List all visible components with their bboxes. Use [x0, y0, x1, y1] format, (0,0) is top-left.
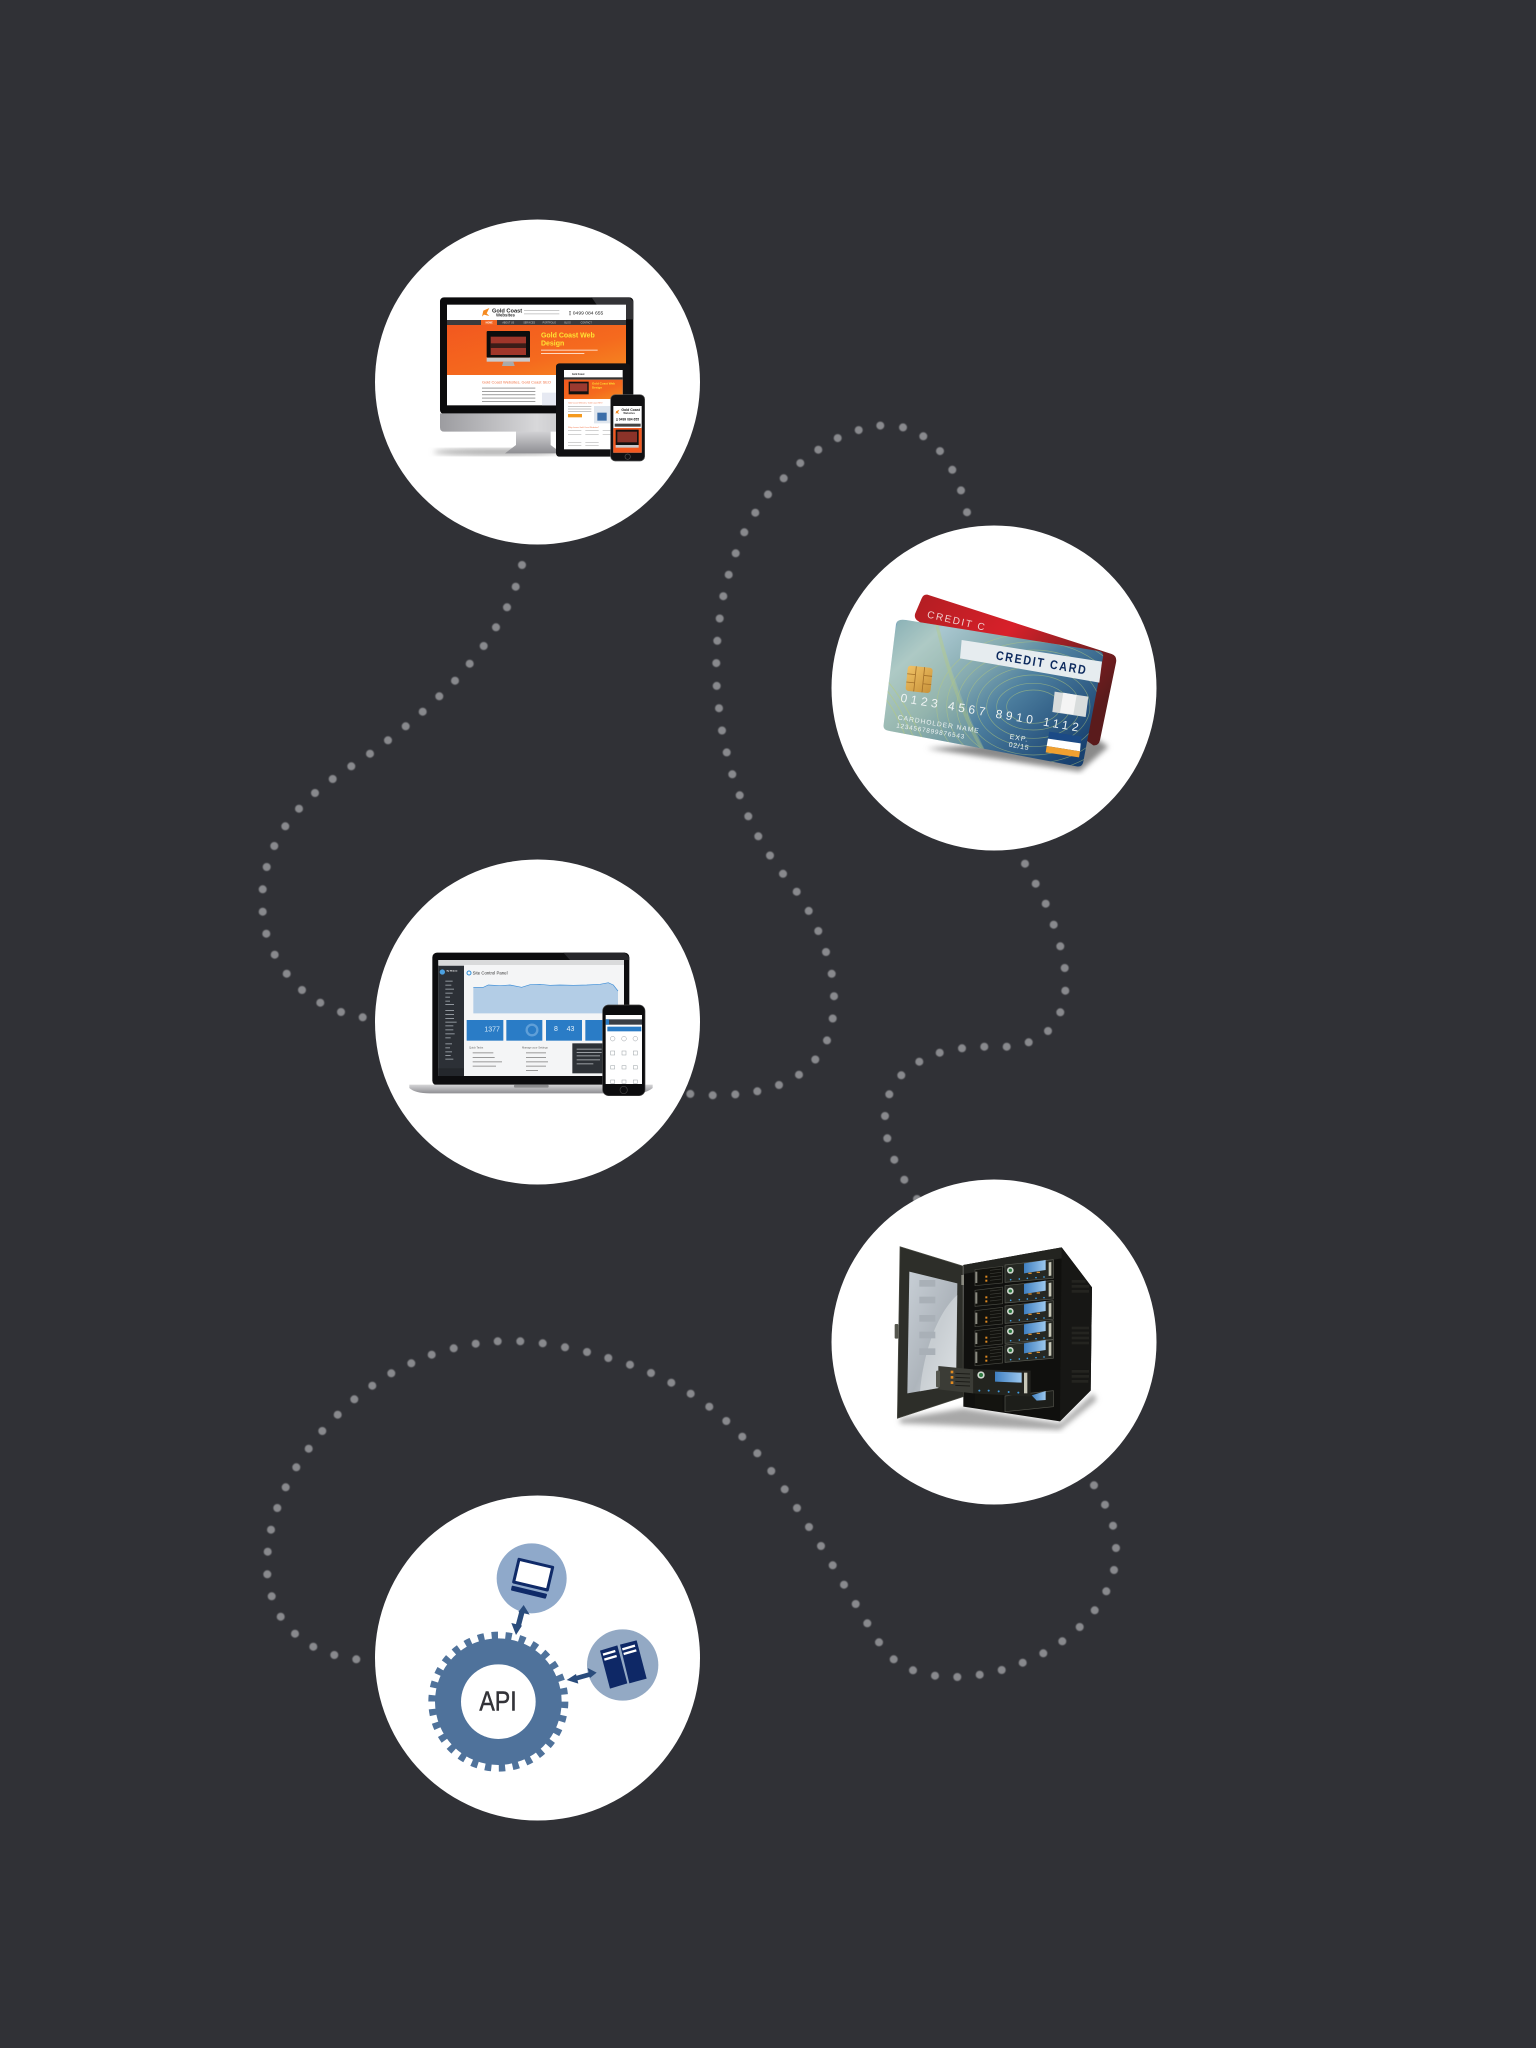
- card shadow: [927, 737, 1108, 772]
- card number: 0123 4567 8910 1112: [900, 691, 1081, 735]
- card logo: [1048, 732, 1082, 743]
- monitor: Gold Coast: [492, 308, 522, 314]
- laptop: 8: [554, 1026, 558, 1033]
- task lists: Quick Tasks: [469, 1046, 484, 1050]
- monitor: PORTFOLIO: [543, 323, 556, 325]
- white circle: [832, 526, 1156, 850]
- red card: CREDIT C: [926, 610, 987, 634]
- tablet: Gold Coast Websites, Gold Coast SEO: [568, 402, 603, 405]
- node: API integration: [375, 1496, 700, 1820]
- white circle: [375, 220, 700, 544]
- monitor: CONTACT: [581, 322, 592, 325]
- white circle: [375, 1496, 700, 1820]
- card title: CREDIT CARD: [995, 648, 1089, 678]
- infographic canvas: [258, 220, 1156, 1820]
- tablet: Gold Coast Web: [592, 382, 615, 386]
- laptop badge: [497, 1543, 567, 1613]
- pulled-out drive: [936, 1366, 1031, 1397]
- area chart: [473, 983, 618, 1013]
- icon: credit cards: [883, 595, 1130, 780]
- phone: ▯ 0499 084 655: [616, 418, 639, 422]
- icon: laptop and phone: [409, 953, 653, 1096]
- tablet: [556, 363, 630, 457]
- dotted connector: credit card to server: [885, 864, 1065, 1199]
- white circle: [832, 1180, 1156, 1504]
- laptop: Site Control Panel: [473, 971, 508, 976]
- laptop: Manage your Settings: [522, 1046, 549, 1050]
- phone: [611, 395, 645, 461]
- hologram: [1052, 692, 1088, 717]
- monitor: BLOG: [564, 323, 571, 325]
- laptop: My Website: [447, 970, 458, 973]
- phone: Websites: [623, 411, 635, 415]
- laptop: 1377: [484, 1026, 500, 1033]
- phone: Gold Coast: [621, 408, 641, 412]
- dotted connector: server to API: [267, 1341, 1116, 1677]
- blue card: [884, 620, 1104, 766]
- red card: [915, 595, 1116, 745]
- icon: responsive devices: [433, 297, 645, 461]
- open door: [895, 1247, 964, 1418]
- phone: [603, 1005, 645, 1096]
- API label: API: [479, 1686, 517, 1717]
- monitor: [433, 297, 633, 456]
- arrow: gear to laptop: [511, 1605, 530, 1635]
- tablet: Design: [592, 385, 602, 389]
- node: credit card payments: [832, 526, 1156, 850]
- icon: server rack: [895, 1247, 1097, 1430]
- blue card: 02/15: [1008, 742, 1030, 752]
- drive bays: [975, 1260, 1053, 1412]
- arrow: gear to server: [567, 1668, 597, 1684]
- dotted connector: website to panel: [263, 565, 522, 1017]
- node: server hosting: [832, 1180, 1156, 1504]
- holder: CARDHOLDER NAME: [897, 714, 980, 735]
- tablet: Gold Coast: [572, 373, 585, 376]
- blue card: EXP.: [1009, 734, 1029, 744]
- tablet: Why choose Gold Coast Websites?: [568, 426, 600, 429]
- blue card: 1234567899876543: [896, 722, 966, 741]
- node: responsive website: [375, 220, 700, 544]
- monitor: HOME: [486, 323, 493, 325]
- monitor: SERVICES: [523, 323, 536, 325]
- monitor: Gold Coast Websites, Gold Coast SEO: [482, 380, 551, 385]
- laptop: [409, 953, 653, 1093]
- node: control panel: [375, 860, 700, 1184]
- gear: [433, 1636, 564, 1767]
- white circle: [375, 860, 700, 1184]
- server badge: [587, 1629, 658, 1701]
- monitor: Design: [541, 341, 564, 348]
- icon: API gear diagram: [433, 1543, 658, 1767]
- stat tiles: [467, 1020, 503, 1041]
- monitor: ABOUT US: [502, 322, 515, 325]
- rack body: [963, 1247, 1092, 1421]
- signature strip: [960, 640, 1102, 683]
- chip: [905, 665, 933, 693]
- monitor: Gold Coast Web: [541, 333, 595, 340]
- laptop: 43: [567, 1026, 575, 1033]
- dotted connector: panel to credit card: [690, 426, 967, 1095]
- monitor: Websites: [496, 312, 516, 317]
- monitor: ▯ 0499 084 655: [569, 310, 604, 316]
